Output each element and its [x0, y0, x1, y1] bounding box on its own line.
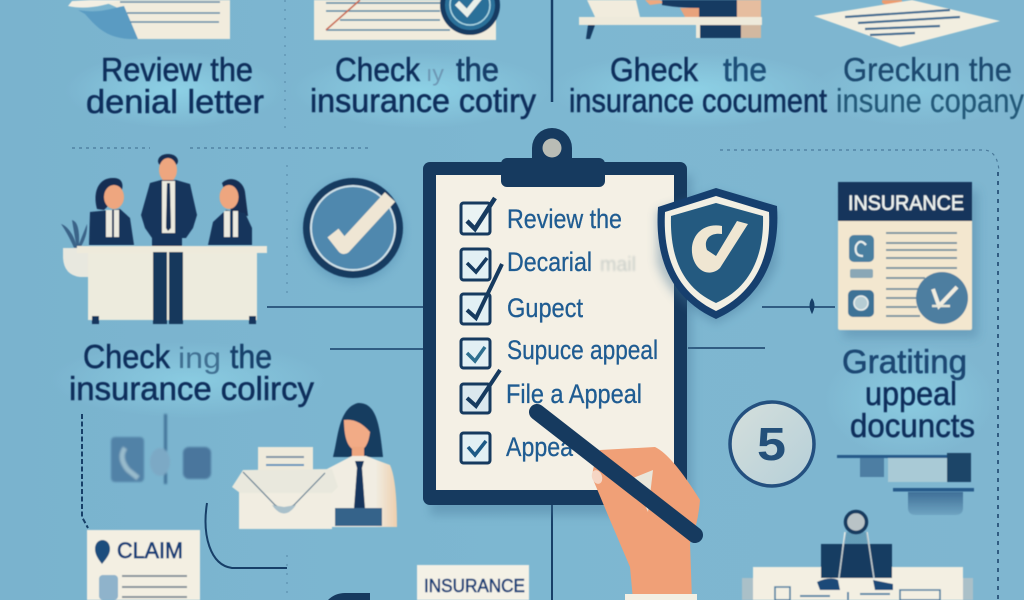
heading: check the insurance company: [836, 51, 1024, 119]
icon: binder clip and paper: [742, 512, 973, 600]
checklist item 6: Appea: [506, 432, 574, 462]
icon: document on table: [814, 0, 1000, 47]
shield with check: [657, 188, 777, 323]
heading: review the denial letter: Review the: [101, 51, 253, 88]
heading: check the insurance document: [569, 51, 827, 119]
insurance card: [838, 182, 978, 338]
checklist item 2: Decarial: [507, 247, 592, 277]
heading: checking the insurance policy: insurance colircy: [69, 370, 314, 407]
checklist item 5: File a Appeal: [506, 379, 642, 409]
card check badge: [916, 272, 968, 324]
dark shape at bottom edge: [328, 593, 370, 600]
centre person: [141, 154, 197, 246]
heading: review the denial letter: [86, 51, 264, 120]
pen: [537, 412, 695, 535]
icon: denial letter: [68, 0, 230, 39]
checklist item 2: mail: [600, 254, 636, 276]
heading: checking the insurance policy: ing: [178, 342, 221, 375]
hand holding pen: [537, 412, 700, 600]
pot: [63, 248, 90, 277]
heading: check the insurance policy: the: [456, 51, 499, 88]
checklist item 4: [461, 335, 658, 368]
heading: check the insurance policy: insurance cotiry: [310, 82, 536, 119]
checklist item 1: [461, 198, 622, 234]
icon: three people at desk: [61, 154, 267, 324]
heading: check the insurance policy: Check: [335, 51, 420, 88]
heading: checking the insurance policy: Check: [83, 338, 170, 375]
heading: check the insurance document: insurance cocument: [569, 82, 827, 119]
text glow highlights: [50, 52, 1024, 458]
icon: check circle: [302, 178, 404, 283]
heading: checking the insurance policy: [69, 338, 314, 407]
heading: check the insurance policy: [310, 51, 536, 119]
heading: granting appeal documents: Gratiting: [842, 343, 967, 380]
icon: policy document with badge: [314, 0, 500, 40]
heading: check the insurance document: Gheck: [610, 51, 698, 88]
card icon top: [849, 235, 874, 262]
plant: [61, 220, 87, 250]
envelope: [232, 447, 338, 529]
card icon bottom: [848, 290, 874, 317]
heading: check the insurance company: Greckun the: [843, 51, 1012, 88]
checklist item 6: [461, 432, 574, 463]
heading: review the denial letter: denial letter: [86, 83, 264, 120]
checklist item 3: [461, 264, 583, 324]
heading: check the insurance policy: ıy: [426, 61, 444, 86]
clipboard: [423, 128, 692, 515]
checklist item 5: [461, 370, 642, 413]
heading: granting appeal documents: uppeal: [865, 375, 957, 412]
desk: [77, 246, 267, 253]
claim document: [87, 530, 200, 600]
paper: [436, 175, 674, 490]
faded icons lower left: [111, 414, 211, 484]
card title: INSURANCE: [848, 192, 964, 215]
checklist item 2: [461, 247, 636, 280]
heading: granting appeal documents: [842, 343, 975, 444]
checklist item 3: Gupect: [507, 293, 583, 323]
woman: [325, 403, 397, 527]
insurance document bottom: INSURANCE: [424, 576, 525, 596]
icon: person at desk: [579, 0, 762, 39]
heading: granting appeal documents: docuncts: [850, 407, 975, 444]
icon: woman with envelope: [232, 403, 397, 529]
heading: checking the insurance policy: the: [230, 338, 272, 375]
checklist item 1: Review the: [507, 204, 622, 234]
faded shelf icons lower right: [837, 453, 974, 515]
heading: check the insurance document: the: [723, 51, 767, 88]
step number badge: 5: [757, 418, 786, 470]
insurance document bottom: [417, 565, 529, 600]
step number badge: [730, 402, 814, 486]
left person: [89, 178, 134, 245]
clip: [501, 128, 605, 187]
claim document: CLAIM: [117, 538, 183, 563]
right person: [208, 179, 252, 245]
checklist item 4: Supuce appeal: [507, 335, 658, 365]
